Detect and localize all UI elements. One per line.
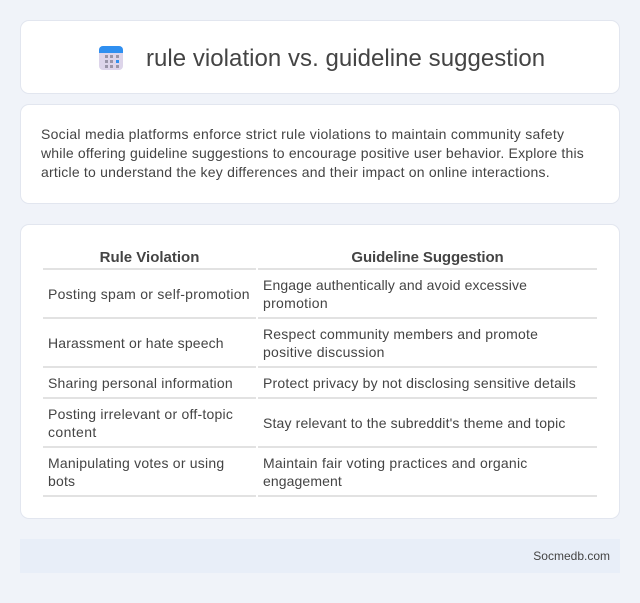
row 2 guideline: Respect community members and promote [263,326,538,342]
row 5 guideline: engagement [263,473,342,489]
footer source text: Socmedb.com [533,549,610,563]
row 5 guideline: Maintain fair voting practices and organic [263,455,528,471]
intro text: while offering guideline suggestions to encourage positive user behavior. Explore this [41,145,584,161]
row 3 rule: Sharing personal information [48,375,233,391]
row 5 rule [48,455,224,489]
intro text: Social media platforms enforce strict rule violations to maintain community safety [41,126,564,142]
panel: title card [20,20,620,94]
row 1 guideline: promotion [263,295,328,311]
row 4 guideline: Stay relevant to the subreddit's theme and topic [263,415,566,431]
row 4 rule: content [48,424,97,440]
row 1 guideline: Engage authentically and avoid excessive [263,277,527,293]
row 2 guideline: positive discussion [263,344,385,360]
row 3 guideline: Protect privacy by not disclosing sensitive details [263,375,576,391]
row 2 rule: Harassment or hate speech [48,335,224,351]
panel: introduction [20,104,620,204]
panel: comparison table [20,224,620,519]
footer bar [20,539,620,573]
row 1 guideline [263,277,527,311]
intro text: article to understand the key differences and their impact on online interactions. [41,164,550,180]
row 4 rule: Posting irrelevant or off-topic [48,406,233,422]
row 1 rule: Posting spam or self-promotion [48,286,250,302]
row 5 guideline [263,455,528,489]
intro text [41,126,584,180]
row 4 rule [48,406,233,440]
table header: rule violation: Rule Violation [100,249,199,266]
row 2 guideline [263,326,538,360]
row 5 rule: Manipulating votes or using [48,455,224,471]
title: rule violation vs. guideline suggestion [146,45,545,72]
row 5 rule: bots [48,473,75,489]
table header: guideline suggestion: Guideline Suggestion [351,249,504,266]
icon: calendar [99,46,123,70]
